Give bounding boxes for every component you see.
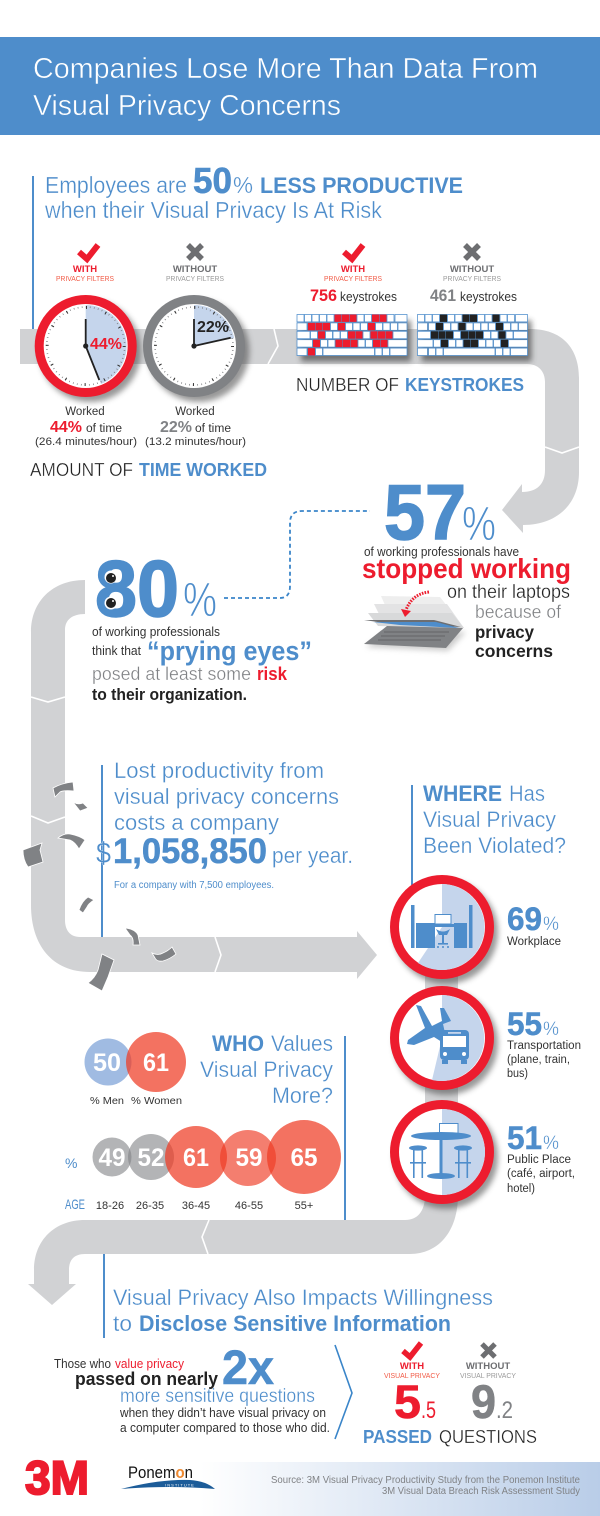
stat: without visual privacy 9.2: WITHOUT [466,1361,510,1372]
icon: check with privacy filters (clock): WITH [73,264,97,275]
clock caption: without filters: of time [195,423,231,435]
bubble chart: by age [65,1120,341,1212]
icon: cafe table and stools [409,1124,472,1179]
label: amount of time worked: TIME WORKED [139,460,267,480]
keystrokes header: without filters: PRIVACY FILTERS [443,274,501,283]
keyboard: black keys without filters [418,314,532,362]
section heading: disclose sensitive information [103,1254,493,1338]
stat: 80 percent prying eyes: posed at least some [92,664,251,684]
clock: 44 percent with filters: 44% [90,336,122,353]
stat: without visual privacy 9.2: .2 [496,1397,513,1424]
clock caption: with filters: of time [86,423,122,435]
bubble chart: by age: 65 [290,1144,318,1172]
panel: workplace circle icon [390,875,498,984]
header banner: Visual Privacy Concerns [33,90,341,122]
bubble chart: by age: 46-55 [235,1200,263,1212]
text block: passed on nearly 2x: more sensitive questions [120,1386,315,1407]
chevron divider arrow [335,1345,352,1439]
section: lost productivity cost: 1,058,850 [113,832,267,871]
section heading: disclose sensitive information: to [113,1311,132,1336]
label: passed questions: QUESTIONS [439,1427,537,1447]
stat: 80 percent prying eyes: 80 [95,544,179,633]
bubble chart: by age: % [65,1155,77,1171]
section heading: disclose sensitive information: Disclose Sensitive Information [139,1311,451,1336]
keystrokes header: with filters: PRIVACY FILTERS [324,274,382,283]
section heading: who values privacy: Visual Privacy [200,1057,333,1082]
clock caption: with filters [35,406,137,448]
stat: 80 percent prying eyes: of working professionals [92,624,220,639]
header banner [0,37,600,135]
bubble chart: by age: 59 [236,1144,262,1172]
text block: passed on nearly 2x: passed on nearly [75,1369,218,1389]
stat: transportation 55 percent: 55 [507,1006,542,1042]
stat: 80 percent prying eyes: “prying eyes” [147,636,312,666]
clock: 22 percent without filters [143,295,250,402]
text block: passed on nearly 2x: 2x [222,1342,274,1395]
stat: workplace 69 percent [507,901,561,948]
label: passed questions: PASSED [363,1427,432,1447]
text block: passed on nearly 2x: a computer compared to those who did. [120,1421,330,1435]
bubble chart: by age: 61 [183,1144,209,1172]
stat: 80 percent prying eyes: % [183,574,217,627]
stat: 57 percent stopped working: privacy [475,622,534,642]
stat: workplace 69 percent: Workplace [507,936,561,948]
logo: Ponemon Institute [121,1463,215,1489]
section heading: who values privacy: Values [271,1031,333,1056]
clock: 44 percent with filters [35,295,141,402]
text block: passed on nearly 2x: Those who [54,1357,111,1371]
clock caption: with filters: Worked [65,406,105,418]
stat: public place 51 percent: % [543,1133,559,1154]
logo: Ponemon Institute: INSTITUTE [165,1482,195,1488]
bubble chart: by age: 52 [138,1144,164,1172]
bubble chart: men vs women: % Men [90,1095,124,1107]
arrow band: lower flow to disclosure section [28,950,458,1305]
stat: 57 percent stopped working: on their laptops [447,582,570,603]
stat: public place 51 percent: Public Place [507,1154,571,1166]
icon: check with privacy filters (clock): PRIVACY FILTERS [56,274,114,283]
icon: x without privacy filters (clock): WITHOUT [173,264,217,275]
icon: office desk [411,905,472,948]
arrow band: top flow to 57% [20,329,579,533]
stat: without visual privacy 9.2 [460,1344,516,1428]
stat: transportation 55 percent: (plane, train, [507,1054,570,1066]
text block: passed on nearly 2x: when they didn’t have visual privacy on [119,1406,326,1420]
source text: 3M Visual Data Breach Risk Assessment Study [382,1486,580,1497]
icon: check with privacy filters (clock) [56,245,114,283]
label: number of keystrokes: KEYSTROKES [405,375,524,395]
keystrokes header: without filters [430,245,517,305]
section heading: who values privacy [200,1031,346,1220]
section: lost productivity cost: For a company with 7,500 employees. [114,880,274,891]
stat: 80 percent prying eyes: to their organization. [92,685,247,704]
section heading: where violated: Has [509,781,545,806]
dotted connector between 80 and 57 stats [224,511,370,598]
section heading: less productive: LESS PRODUCTIVE [260,173,463,198]
stat: with visual privacy 5.5: VISUAL PRIVACY [384,1371,440,1380]
stat: 80 percent prying eyes [92,544,312,704]
logo: Ponemon Institute: Ponemon [128,1463,193,1482]
bubble chart: by age: 55+ [295,1200,313,1212]
section: lost productivity cost: costs a company [114,810,279,835]
keystrokes header: with filters [310,245,397,305]
stat: workplace 69 percent: 69 [507,901,542,937]
clock caption: with filters: (26.4 minutes/hour) [35,436,137,448]
stat: with visual privacy 5.5: .5 [421,1397,436,1424]
section heading: less productive: % [233,172,253,198]
footer gradient panel [200,1462,600,1516]
keystrokes header: without filters: 461 [430,286,456,305]
icon: x without privacy filters (clock): PRIVACY FILTERS [166,274,224,283]
section heading: less productive: when their Visual Privacy Is At Risk [44,197,382,223]
header banner: Companies Lose More Than Data From [33,53,538,85]
clock caption: without filters: (13.2 minutes/hour) [145,436,246,448]
icon: flying paper bills [23,782,176,991]
section heading: less productive [32,160,463,329]
stat: 57 percent stopped working: stopped working [362,553,571,584]
icon: bus [440,1030,469,1064]
stat: public place 51 percent: (café, airport, [507,1168,575,1180]
bubble chart: by age: 18-26 [96,1200,124,1212]
clock: 22 percent without filters: 22% [197,319,229,336]
bubble chart: men vs women: 50 [93,1049,121,1077]
keystrokes header: without filters: WITHOUT [450,264,494,275]
stat: public place 51 percent [507,1120,575,1195]
clock caption: without filters: 22% [160,419,192,436]
section heading: where violated [411,781,566,885]
stat: with visual privacy 5.5: 5 [394,1375,421,1428]
label: amount of time worked [30,460,267,480]
section heading: where violated: Visual Privacy [423,807,556,832]
stat: with visual privacy 5.5 [384,1343,440,1428]
keystrokes header: with filters: keystrokes [340,290,397,304]
section: lost productivity cost: Lost productivity from [114,758,324,783]
stat: without visual privacy 9.2: VISUAL PRIVACY [460,1371,516,1380]
keystrokes header: with filters: WITH [341,264,365,275]
clock caption: without filters [145,406,246,448]
stat: 80 percent prying eyes: think that [92,643,141,658]
icon: eyes in the digit 8 [104,570,118,610]
stat: transportation 55 percent [507,1006,581,1080]
source text: Source: 3M Visual Privacy Productivity Study from the Ponemon Institute [271,1475,580,1486]
label: number of keystrokes [296,375,524,395]
stat: transportation 55 percent: Transportation [507,1040,581,1052]
section: lost productivity cost: visual privacy concerns [114,784,339,809]
section heading: less productive: 50 [193,160,232,201]
bubble chart: by age: 26-35 [136,1200,164,1212]
stat: without visual privacy 9.2: 9 [471,1375,496,1428]
section heading: where violated: WHERE [423,781,502,806]
icon: airplane [407,1005,451,1045]
source text [271,1475,580,1497]
logo: 3M: 3M [25,1451,89,1504]
section heading: less productive: Employees are [45,172,187,198]
stat: with visual privacy 5.5: WITH [400,1361,424,1372]
text block: passed on nearly 2x: value privacy [115,1357,185,1371]
stat: public place 51 percent: 51 [507,1120,542,1156]
stat: 80 percent prying eyes: risk [257,664,288,684]
stat: 57 percent stopped working: 57 [384,468,466,556]
stat: 57 percent stopped working: because of [475,602,562,622]
section: lost productivity cost [96,758,353,937]
arrow band: left flow to where [31,580,377,979]
stat: 57 percent stopped working [362,468,571,661]
section heading: where violated: Been Violated? [423,833,566,858]
bubble chart: men vs women: 61 [143,1049,169,1077]
label: amount of time worked: AMOUNT OF [30,460,133,480]
text block: passed on nearly 2x [54,1342,330,1435]
section heading: who values privacy: More? [272,1083,333,1108]
section: lost productivity cost: $ [96,837,111,870]
panel: public place circle icon [390,1100,498,1209]
bubble chart: men vs women [84,1032,186,1107]
stat: 57 percent stopped working: % [462,498,496,551]
icon: closing laptop [364,592,466,651]
label: passed questions [363,1427,537,1447]
stat: transportation 55 percent: % [543,1019,559,1040]
keystrokes header: without filters: keystrokes [460,290,517,304]
bubble chart: by age: 36-45 [182,1200,210,1212]
section: lost productivity cost: per year. [272,843,353,868]
section heading: who values privacy: WHO [212,1031,264,1056]
keyboard: red keys with filters [297,314,411,362]
icon: x without privacy filters (clock) [166,245,224,283]
clock caption: with filters: 44% [50,419,82,436]
stat: public place 51 percent: hotel) [507,1183,535,1195]
stat: 57 percent stopped working: concerns [475,641,553,661]
label: number of keystrokes: NUMBER OF [296,375,399,395]
panel: transportation circle icon [390,986,498,1095]
stat: transportation 55 percent: bus) [507,1068,528,1080]
stat: 57 percent stopped working: of working professionals have [364,544,519,559]
keystrokes header: with filters: 756 [310,286,337,305]
bubble chart: by age: 49 [98,1144,126,1172]
clock caption: without filters: Worked [175,406,215,418]
bubble chart: by age: AGE [65,1196,85,1212]
section heading: disclose sensitive information: Visual Privacy Also Impacts Willingness [113,1285,493,1310]
bubble chart: men vs women: % Women [131,1095,182,1107]
stat: workplace 69 percent: % [543,914,559,935]
